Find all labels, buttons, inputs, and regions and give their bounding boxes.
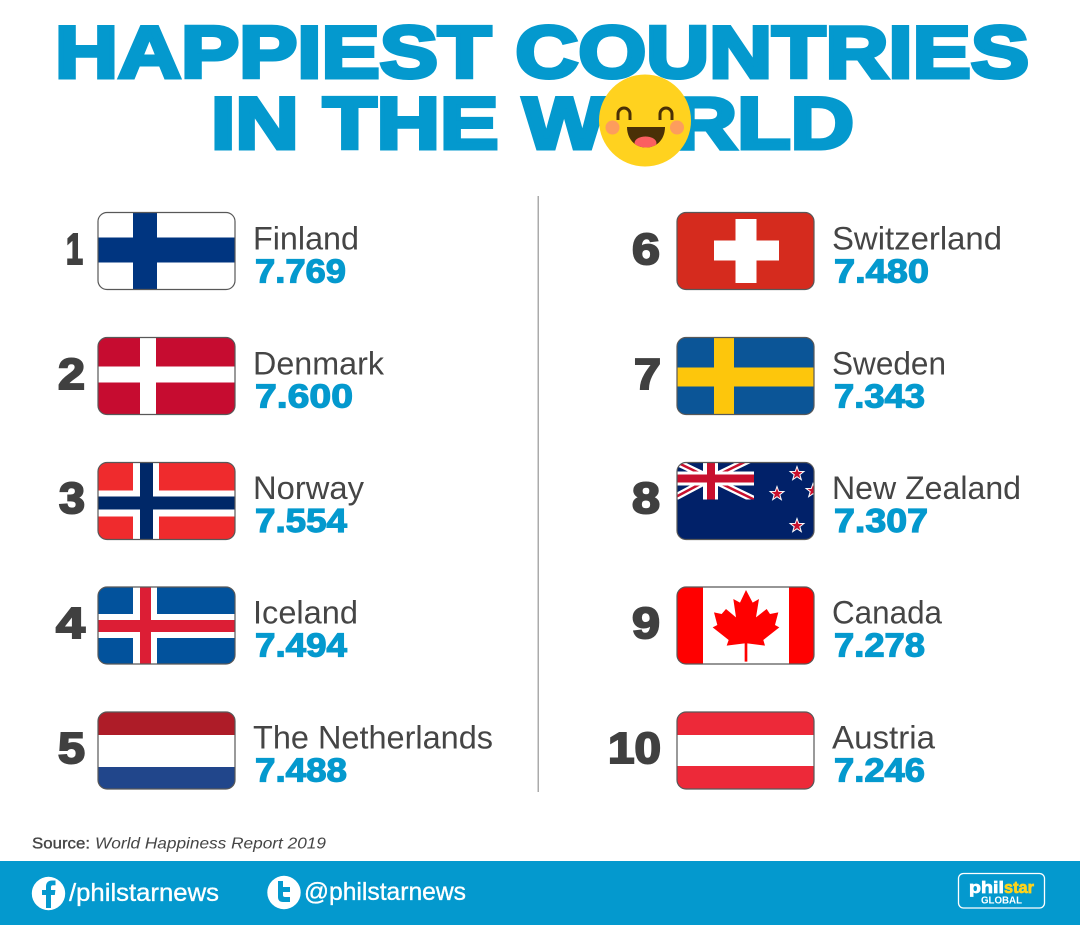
row 1: Finland: 7.769: [255, 252, 346, 290]
icon: smiley face: [599, 74, 691, 166]
row 2: Denmark: 7.600: [255, 378, 353, 414]
row 9: Canada: [632, 587, 942, 664]
row 5: The Netherlands: 7.488: [255, 752, 347, 788]
title: IN THE WORLD: [211, 84, 854, 164]
row 9: Canada: 9: [632, 599, 660, 648]
row 8: New Zealand: 7.307: [834, 502, 928, 539]
row 1: Finland: Finland: [253, 220, 359, 256]
row 3: Norway: [59, 462, 364, 540]
row 2: Denmark: Denmark: [253, 346, 385, 382]
row 6: Switzerland: 6: [632, 225, 660, 274]
logo: philstar global: GLOBAL: [981, 896, 1022, 906]
icon: facebook: [32, 877, 65, 910]
facebook handle: /philstarnews: [69, 879, 219, 907]
source note: Source:: [32, 836, 90, 852]
row 3: Norway: 3: [59, 474, 85, 523]
footer bar: [0, 861, 1080, 925]
divider: [538, 196, 539, 792]
row 8: New Zealand: 8: [632, 474, 660, 523]
icon: twitter: [267, 876, 301, 909]
row 7: Sweden: 7.343: [834, 378, 925, 414]
row 4: Iceland: 4: [56, 599, 86, 648]
row 9: Canada: 7.278: [834, 626, 925, 664]
row 7: Sweden: Sweden: [832, 346, 946, 382]
source note: World Happiness Report 2019: [95, 836, 326, 852]
row 1: Finland: [66, 212, 359, 290]
row 4: Iceland: 7.494: [255, 626, 348, 664]
logo: philstar global: phil: [969, 878, 1004, 897]
logo: philstar global: [958, 874, 1044, 908]
row 6: Switzerland: Switzerland: [832, 220, 1002, 256]
title: [55, 12, 1029, 164]
row 7: Sweden: [634, 338, 946, 414]
row 3: Norway: Norway: [253, 470, 364, 506]
row 4: Iceland: [56, 587, 358, 664]
row 2: Denmark: 2: [58, 350, 85, 399]
row 10: Austria: Austria: [832, 720, 935, 756]
twitter handle: @philstarnews: [304, 878, 466, 906]
row 10: Austria: 10: [608, 724, 661, 773]
row 7: Sweden: 7: [634, 350, 661, 399]
title: HAPPIEST COUNTRIES: [55, 12, 1029, 94]
row 10: Austria: 7.246: [834, 752, 925, 788]
row 5: The Netherlands: 5: [58, 724, 85, 773]
row 9: Canada: Canada: [832, 594, 942, 630]
row 8: New Zealand: [632, 458, 1021, 540]
logo: philstar global: star: [1004, 878, 1034, 897]
row 3: Norway: 7.554: [255, 502, 348, 539]
row 10: Austria: [608, 712, 935, 789]
row 6: Switzerland: 7.480: [834, 252, 929, 290]
row 1: Finland: 1: [66, 225, 83, 274]
row 5: The Netherlands: The Netherlands: [253, 720, 493, 756]
row 5: The Netherlands: [58, 712, 493, 789]
row 8: New Zealand: New Zealand: [832, 470, 1021, 506]
row 2: Denmark: [58, 338, 385, 414]
row 6: Switzerland: [632, 212, 1002, 290]
row 4: Iceland: Iceland: [253, 594, 358, 630]
